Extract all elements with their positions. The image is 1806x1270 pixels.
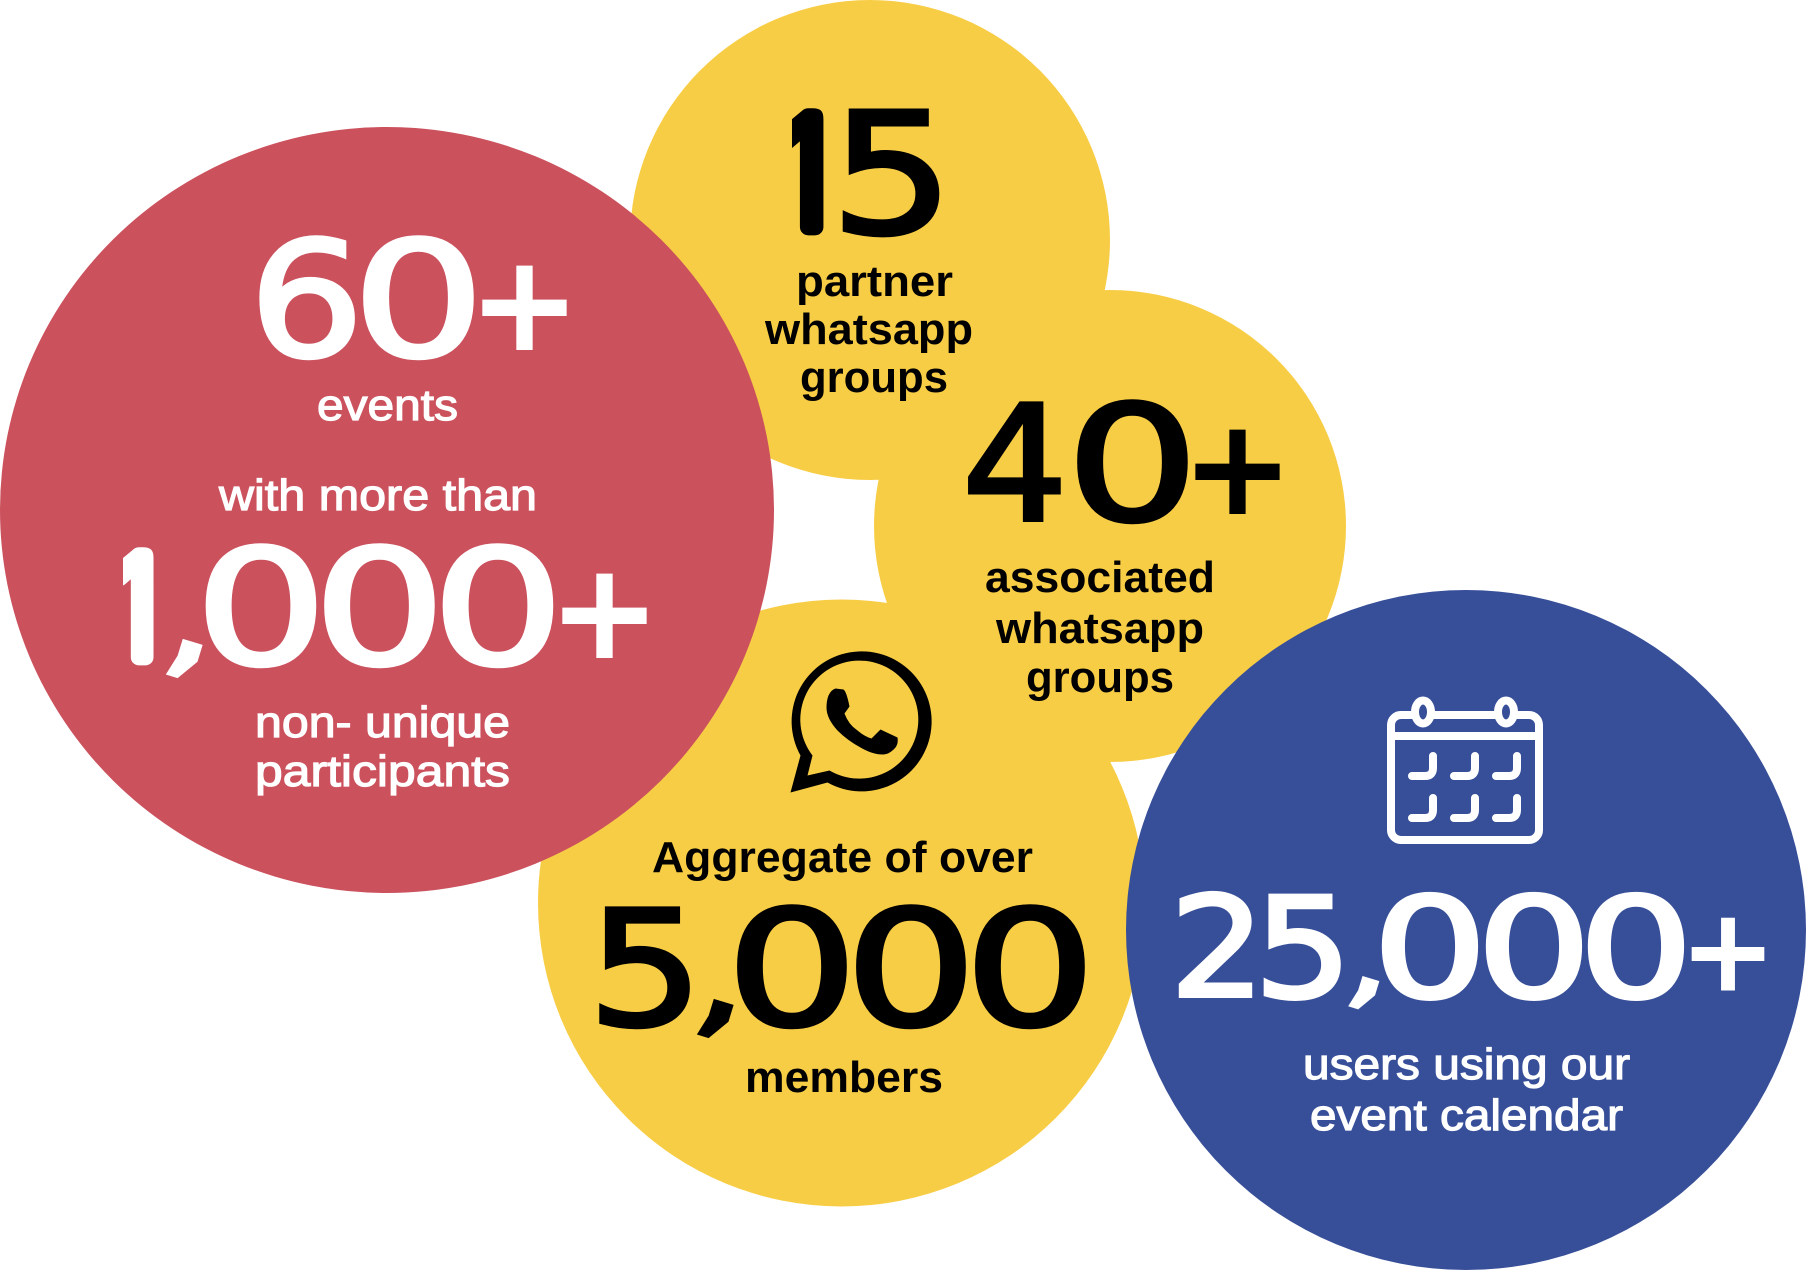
stat: 15 partner whatsapp groups: 5 [830,77,954,273]
stat: 15 partner whatsapp groups: whatsapp [764,305,973,354]
panel: members circle [538,600,1145,1206]
stat: 25,000+ calendar users: 2 [1170,867,1265,1029]
stat: 40+ associated whatsapp groups: whatsapp [995,604,1204,653]
stat: 60+ events: 6 [249,207,364,394]
stat: 25,000+ calendar users: users using our [1303,1040,1630,1089]
panel: calendar users circle [1126,590,1806,1270]
stat: 25,000+ calendar users: 5 [1254,868,1352,1030]
stat: 40+ associated whatsapp groups: associated [985,553,1215,602]
stat: 1,000+ non-unique participants: with more than [218,471,537,520]
stat: 40+ associated whatsapp groups [962,371,1290,702]
stat: 5,000 members: 0 [726,876,858,1063]
stat: 5,000 members: Aggregate of over [652,833,1033,882]
stat: 1,000+ non-unique participants: non- unique [255,698,510,747]
stat: 5,000 members: members [745,1053,943,1102]
stat: 25,000+ calendar users: event calendar [1310,1091,1623,1140]
stat: 1,000+ non-unique participants: 0 [432,515,564,702]
panel: events circle [0,127,774,893]
stat: 15 partner whatsapp groups: groups [800,353,948,402]
stat: 5,000 members: 5 [588,876,704,1063]
stat: 25,000+ calendar users [1170,867,1773,1140]
stat: 15 partner whatsapp groups: partner [796,257,953,306]
stat: 5,000 members [588,833,1096,1102]
stat: 40+ associated whatsapp groups: + [1185,396,1290,541]
stat: 1,000+ non-unique participants: , [157,551,240,697]
panel: associated whatsapp groups circle [874,290,1346,762]
stat: 40+ associated whatsapp groups: groups [1026,653,1174,702]
stat: 40+ associated whatsapp groups: 0 [1066,371,1199,558]
stat: 1,000+ non-unique participants: 1 [95,538,180,680]
stat: 60+ events: + [472,232,577,377]
stat: 40+ associated whatsapp groups: 4 [962,371,1068,558]
stat: 60+ events [249,207,577,430]
stat: 1,000+ non-unique participants: 0 [313,515,446,702]
stat: 60+ events: events [317,381,458,430]
stat: 25,000+ calendar users: 0 [1578,868,1694,1030]
stat: 1,000+ non-unique participants: 0 [194,515,328,702]
icon: calendar [1391,700,1539,840]
stat: 1,000+ non-unique participants: + [552,540,657,685]
icon: whatsapp [790,651,932,792]
panel: partner whatsapp groups circle [630,0,1110,480]
stat: 1,000+ non-unique participants: participants [255,747,510,796]
stat: 25,000+ calendar users: 0 [1476,868,1592,1030]
stat: 25,000+ calendar users: 0 [1372,868,1488,1030]
stat: 15 partner whatsapp groups [764,108,972,401]
stat: 5,000 members: , [688,911,771,1057]
stat: 5,000 members: 0 [845,876,977,1063]
stat: 25,000+ calendar users: , [1340,902,1411,1025]
stat: 15 partner whatsapp groups: 1 [760,98,853,251]
stat: 25,000+ calendar users: + [1683,889,1773,1014]
stat: 1,000+ non-unique participants [95,471,657,796]
stat: 60+ events: 0 [352,207,485,394]
stat: 5,000 members: 0 [964,876,1096,1063]
